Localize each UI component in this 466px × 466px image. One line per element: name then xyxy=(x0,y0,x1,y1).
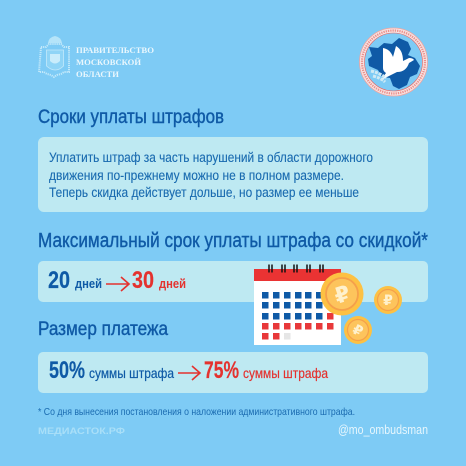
icon: Moscow region coat of arms xyxy=(39,36,69,77)
footnote: * Со дня вынесения постановления о наложении административного штрафа. xyxy=(38,406,355,418)
government name: ОБЛАСТИ xyxy=(76,69,119,79)
government name: МОСКОВСКОЙ xyxy=(76,57,141,67)
arrow: days xyxy=(106,277,129,291)
value: 30 days: дней xyxy=(159,276,186,291)
social handle: @mo_ombudsman xyxy=(338,422,428,437)
panel: intro text xyxy=(38,137,428,212)
value: 20 days: 20 xyxy=(48,267,70,294)
coin: large xyxy=(320,272,364,316)
text block: intro: Уплатить штраф за часть нарушений в области дорожного xyxy=(49,150,373,165)
value: 50 percent: суммы штрафа xyxy=(89,365,174,381)
coin: right xyxy=(374,286,402,314)
government name xyxy=(76,45,154,79)
text block: intro xyxy=(49,150,373,200)
value: 30 days xyxy=(132,267,186,294)
coin: bottom: ₽ xyxy=(350,322,366,340)
calendar xyxy=(254,264,341,345)
value: 75 percent: суммы штрафа xyxy=(243,365,328,381)
heading: payment size: Размер платежа xyxy=(38,318,168,340)
text block: intro: движения по-прежнему можно не в полном размере. xyxy=(49,168,344,183)
icon: ombudsman round logo xyxy=(360,28,428,96)
value: 75 percent xyxy=(204,357,328,384)
panel: days comparison xyxy=(38,261,428,302)
value: 20 days xyxy=(48,267,102,294)
coin: bottom xyxy=(344,316,372,344)
heading: payment terms: Сроки уплаты штрафов xyxy=(38,106,224,128)
source: media stock: МЕДИАСТОК.РФ xyxy=(38,426,125,437)
value: 50 percent: 50% xyxy=(49,357,85,384)
icon: calendar with coins xyxy=(254,264,402,345)
value: 75 percent: 75% xyxy=(204,357,239,384)
text block: intro: Теперь скидка действует дольше, но размер ее меньше xyxy=(49,185,359,200)
arrow: payment xyxy=(178,366,200,380)
panel: payment comparison xyxy=(38,352,428,393)
value: 20 days: дней xyxy=(75,276,102,291)
coin: right: ₽ xyxy=(383,293,393,309)
government emblem and name xyxy=(39,36,154,79)
coin: large: ₽ xyxy=(331,281,354,310)
value: 30 days: 30 xyxy=(132,267,154,294)
government name: ПРАВИТЕЛЬСТВО xyxy=(76,45,154,55)
value: 50 percent xyxy=(49,357,174,384)
